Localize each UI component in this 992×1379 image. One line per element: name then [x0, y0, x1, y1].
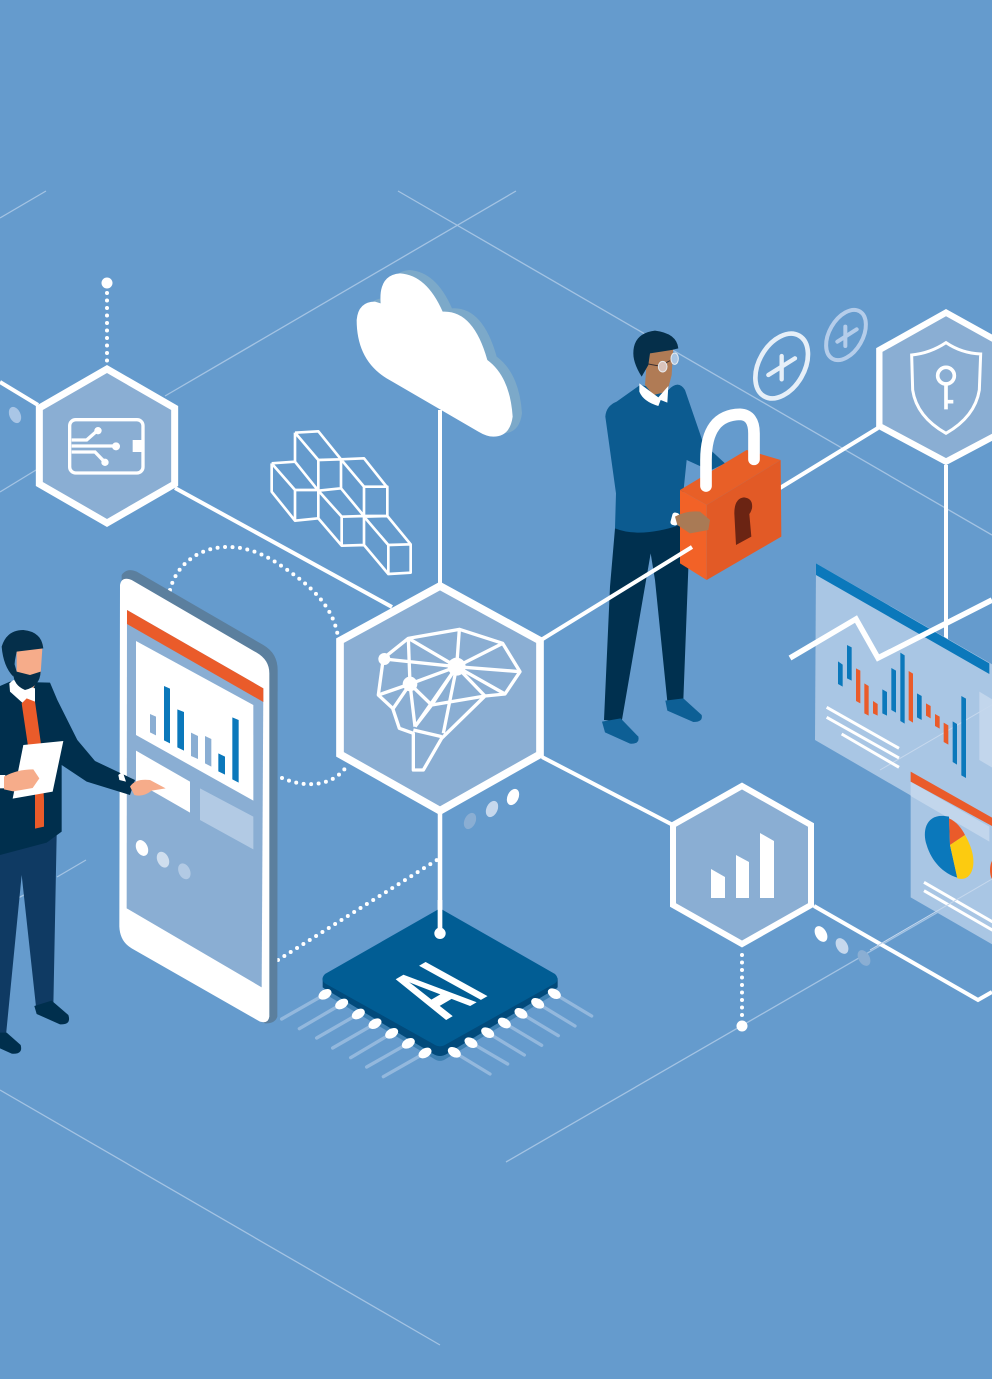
phone	[119, 570, 278, 1023]
chart card	[136, 641, 253, 801]
connector dots	[461, 787, 873, 968]
AI chip	[282, 900, 592, 1077]
small card	[136, 751, 190, 813]
panel bars	[838, 645, 966, 778]
trend line	[790, 600, 992, 658]
cloud	[357, 270, 522, 437]
phone body	[119, 579, 269, 1022]
line in front of man	[541, 547, 692, 640]
dashboard panels	[815, 563, 992, 950]
pie chart	[925, 816, 973, 879]
AI label: AI	[365, 950, 510, 1032]
chart panel	[815, 563, 992, 843]
man presenting	[0, 630, 166, 1054]
hexagon: shield	[879, 313, 992, 462]
orange header	[127, 610, 263, 702]
pie panel	[911, 772, 992, 945]
man with lock	[602, 331, 781, 744]
light card	[200, 788, 253, 849]
panel text lines	[827, 707, 899, 767]
dotted connectors	[107, 293, 742, 1020]
hexagon: bars	[673, 786, 811, 944]
plus icons	[745, 303, 874, 408]
panel header	[816, 563, 989, 674]
connector lines	[0, 382, 992, 1000]
phone screen	[127, 610, 263, 987]
phone edge	[120, 570, 278, 1023]
phone bars	[150, 686, 239, 783]
hexagon: brain	[340, 586, 540, 811]
hexagon: circuit	[39, 369, 175, 523]
chip pins tails	[282, 994, 592, 1077]
wireframe cubes	[272, 431, 411, 574]
padlock	[680, 414, 781, 580]
pagination dots	[133, 838, 193, 881]
end dots	[102, 278, 748, 1032]
pie header	[911, 772, 992, 827]
floating dot	[6, 405, 24, 425]
